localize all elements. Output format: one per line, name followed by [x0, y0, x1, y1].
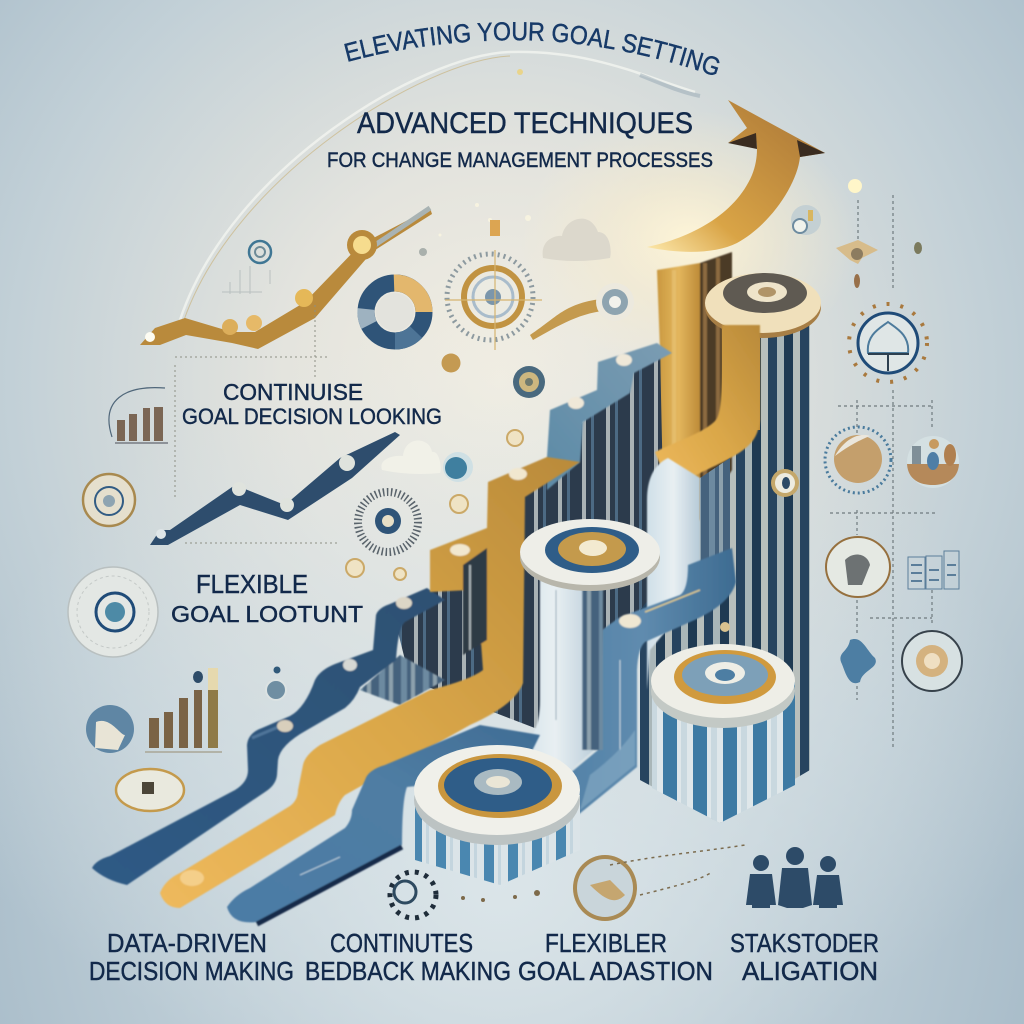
bottom label: flexibler goal adastion: GOAL ADASTION — [518, 956, 713, 986]
subheading: for change management processes: FOR CHANGE MANAGEMENT PROCESSES — [327, 149, 713, 172]
sparkle dots top — [419, 69, 862, 256]
icon: gold ring left — [83, 474, 135, 526]
dashed trails — [610, 845, 745, 895]
bottom label: flexibler goal adastion — [518, 928, 713, 986]
line chart: gold — [140, 208, 432, 349]
gold curve to small ring — [530, 283, 634, 340]
icon: gold outlined circle — [826, 537, 890, 597]
title: elevating your goal setting: ELEVATING YOUR GOAL SETTING — [344, 22, 720, 75]
icon: small target upper left — [222, 241, 271, 294]
teal circle — [443, 452, 473, 482]
bottom label: stakstoder aligation — [730, 928, 879, 986]
text: continue goal decision looking: CONTINUISE — [223, 379, 363, 405]
white pillar under middle disc — [510, 580, 603, 770]
bottom label: data-driven decision making: DECISION MAKING — [89, 956, 294, 986]
bottom label: continues bedback making — [305, 928, 511, 986]
icon: gold target with compass — [445, 250, 542, 350]
top cylinder — [705, 273, 821, 430]
blue ribbon: front right — [550, 548, 736, 815]
cloud: middle — [381, 440, 441, 474]
blue ribbon: back — [92, 588, 445, 885]
striped back tower — [640, 320, 810, 823]
badge — [513, 366, 545, 398]
upper gold ribbon — [655, 325, 760, 490]
text: flexible goal lootunt: FLEXIBLE — [196, 569, 308, 599]
icon: dotted ring bottom — [390, 872, 436, 918]
icon: small bubble — [791, 205, 821, 235]
icon: three people — [746, 847, 843, 908]
gold sphere — [442, 354, 460, 372]
icon: table — [908, 551, 959, 589]
dashed guide frame — [175, 305, 340, 543]
icon: people circle — [907, 436, 959, 488]
gold ribbon — [160, 457, 580, 908]
icon: domed ring with dots — [849, 304, 927, 382]
icon: dark ring with gold medal — [902, 631, 962, 691]
blue ribbon: front left — [227, 725, 540, 924]
icon: gold ornament — [116, 769, 184, 811]
right lower cylinder — [651, 622, 795, 823]
upper blue stairs — [547, 343, 672, 490]
gold tower — [657, 252, 732, 560]
text: flexible goal lootunt: GOAL LOOTUNT — [171, 601, 363, 627]
right side connector lines — [830, 195, 935, 750]
icon: blue blob — [840, 639, 876, 683]
bottom label: continues bedback making: BEDBACK MAKING — [305, 956, 511, 986]
heading: advanced techniques: ADVANCED TECHNIQUES — [357, 107, 693, 140]
white stair pillar — [647, 458, 700, 690]
bottom label: data-driven decision making — [89, 928, 294, 986]
text: continue goal decision looking — [182, 379, 442, 429]
bottom label: data-driven decision making: DATA-DRIVEN — [107, 928, 267, 958]
donut chart — [366, 283, 424, 341]
small dots trail — [461, 890, 540, 902]
sunburst icon — [358, 492, 418, 552]
small gold droplets — [266, 430, 523, 700]
bottom label: flexibler goal adastion: FLEXIBLER — [545, 928, 667, 958]
small ring on tower — [771, 469, 799, 497]
arrow: rising gold arrow — [647, 100, 825, 252]
bottom label: stakstoder aligation: STAKSTODER — [730, 928, 879, 958]
dark stripes under stairs — [395, 350, 665, 730]
icon: peach circle — [825, 427, 891, 493]
bottom label: stakstoder aligation: ALIGATION — [742, 956, 878, 986]
stripes beside white stair — [690, 458, 730, 590]
bar chart left — [145, 668, 222, 752]
bottom cylinder — [414, 745, 580, 885]
icon: gold gizmo — [836, 240, 922, 288]
icon: gold oval — [573, 855, 637, 921]
icon: globe ball — [86, 705, 134, 753]
text: flexible goal lootunt — [171, 569, 363, 627]
text: continue goal decision looking: GOAL DECISION LOOKING — [182, 404, 442, 429]
cloud: top — [543, 219, 611, 261]
middle cylinder — [520, 519, 660, 591]
icon: large target left — [68, 567, 158, 657]
decorative swoosh arc — [180, 52, 700, 320]
icon: bars in arc — [109, 388, 168, 443]
bottom label: continues bedback making: CONTINUTES — [330, 928, 473, 958]
line chart: blue — [150, 432, 400, 545]
